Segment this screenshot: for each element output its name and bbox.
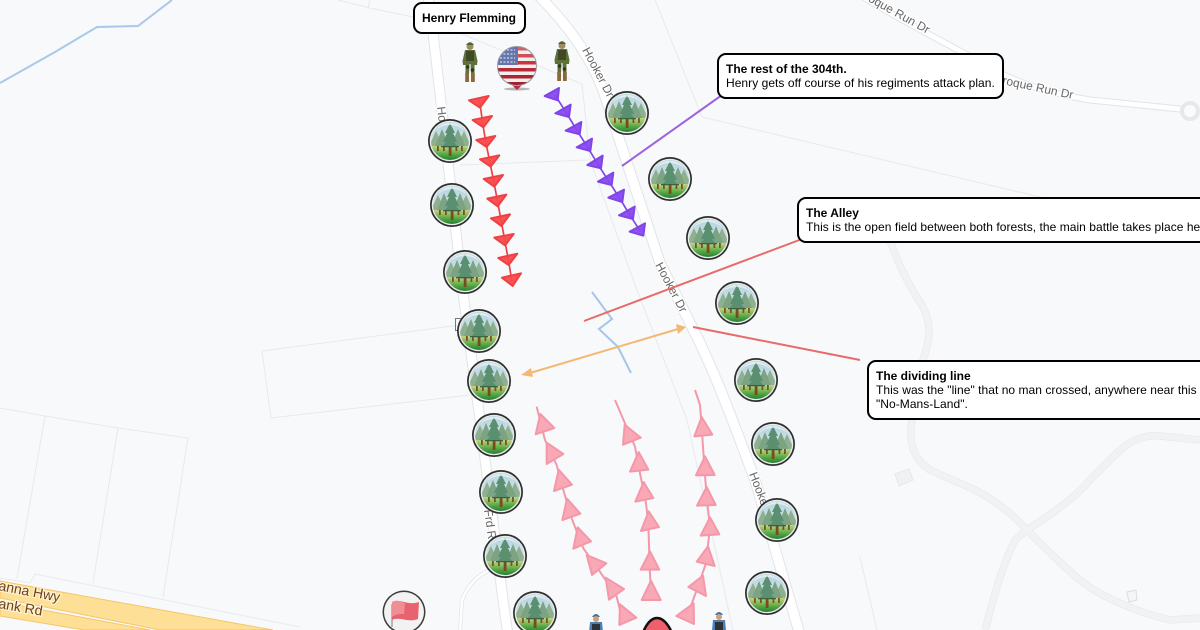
Hooker Dr road: Hooker Dr	[579, 45, 617, 100]
icon: blue soldier right	[712, 612, 726, 630]
Laroque Run Dr road: roque Run Dr	[1001, 73, 1075, 102]
arrow: double headed alley width	[521, 324, 686, 377]
stream top left	[0, 0, 172, 83]
forest icons: right tree line	[605, 91, 799, 615]
icon: US flag pin	[497, 46, 537, 90]
pink Confederate arrow chains	[536, 390, 719, 625]
Ford Rd road: Hooker	[434, 106, 453, 146]
icon: blue soldier left	[588, 614, 604, 630]
grey tracks right	[885, 225, 1200, 630]
icon: red pin at bottom	[640, 618, 675, 630]
Laroque Run Dr road	[860, 0, 1198, 119]
leader line: the rest of the 304th	[622, 95, 722, 166]
callout: the alley: The Alley	[806, 206, 859, 220]
icon: flag marker	[382, 590, 426, 630]
Ford Rd road: Frd Rd	[481, 508, 500, 547]
callout: the dividing line	[867, 360, 1200, 420]
Ford Rd road	[428, 0, 508, 630]
leader line: the dividing line	[693, 327, 860, 360]
callout: the alley	[797, 197, 1200, 243]
highway	[0, 577, 273, 630]
forest icons: left tree line	[428, 119, 557, 630]
callout: the dividing line: The dividing line	[876, 369, 971, 383]
purple regiment arrow chain	[545, 88, 645, 236]
callout: the rest of the 304th	[717, 53, 1004, 99]
callout: the dividing line: This was the "line" that no man crossed, anywhere near this	[876, 383, 1197, 397]
Hooker Dr road	[538, 0, 800, 630]
callout: Henry Flemming: Henry Flemming	[422, 11, 516, 25]
callout: the rest of the 304th: The rest of the 304th.	[726, 62, 847, 76]
Hooker Dr road: Hooker Dr	[652, 260, 690, 315]
red regiment arrow chain	[469, 96, 521, 286]
Hooker Dr road: Hooker Dr	[746, 470, 779, 526]
icon: soldier left	[462, 42, 478, 82]
icon: soldier right	[554, 41, 570, 81]
callout: the dividing line: "No-Mans-Land".	[876, 397, 968, 411]
callout: Henry Flemming	[412, 2, 526, 34]
callout: the rest of the 304th: Henry gets off course of his regiments attack plan.	[726, 76, 995, 90]
creek	[592, 292, 631, 373]
leader line: the alley	[584, 239, 802, 321]
